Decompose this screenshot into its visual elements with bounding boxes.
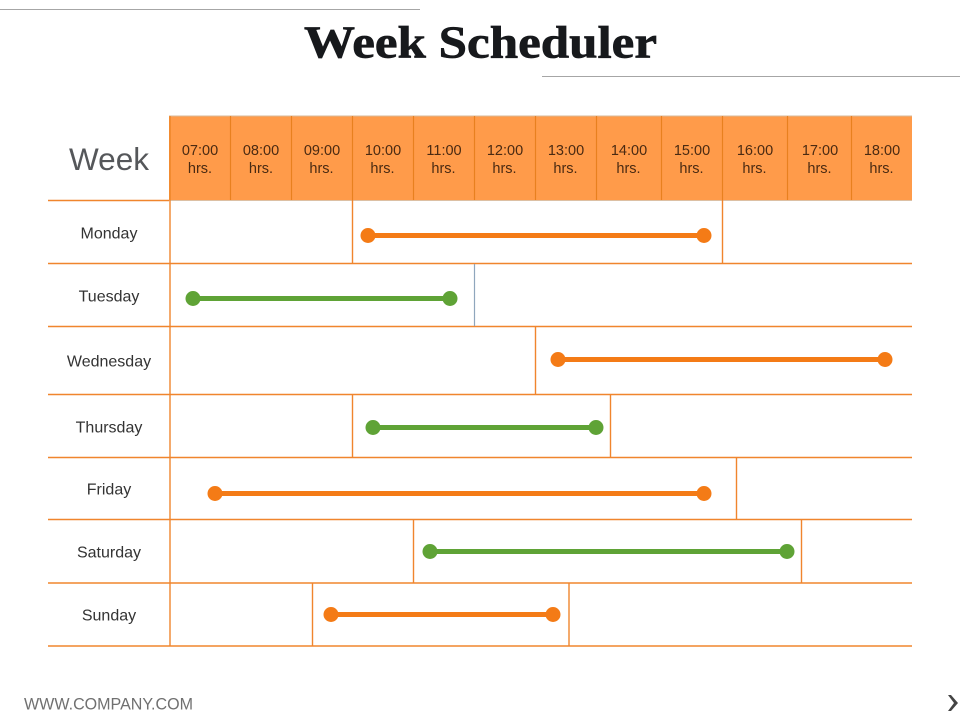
header: hours band: 07:00 bbox=[182, 143, 218, 159]
footer url: WWW.COMPANY.COM bbox=[24, 696, 193, 714]
row label: Sunday: Sunday bbox=[82, 608, 136, 624]
bar: Tuesday 07:00 to 11:00 bbox=[186, 291, 458, 306]
header: hours band: hrs. bbox=[742, 161, 767, 177]
header: hours band: hrs. bbox=[869, 161, 894, 177]
header: hours band bbox=[169, 116, 912, 200]
bar: Friday 07:00 to 15:00 bbox=[208, 486, 712, 501]
header: hours band: 15:00 bbox=[674, 143, 710, 159]
header: hours band: 14:00 bbox=[611, 143, 647, 159]
bar: Thursday 10:00 to 13:00 bbox=[366, 420, 604, 435]
bar: Wednesday 13:00 to 18:00 bbox=[550, 352, 892, 367]
header: hours band: hrs. bbox=[370, 161, 395, 177]
header: hours band: 11:00 bbox=[426, 143, 462, 159]
row label: Tuesday: Tuesday bbox=[79, 288, 139, 306]
header: hours band: 10:00 bbox=[365, 143, 401, 159]
header: hours band: hrs. bbox=[188, 161, 212, 177]
row label: Friday: Friday bbox=[87, 482, 131, 498]
bar: Monday 10:00 to 15:00 bbox=[360, 228, 712, 243]
bar: Saturday 11:00 to 16:00 bbox=[422, 544, 794, 559]
header: hours band: hrs. bbox=[616, 161, 641, 177]
header: hours band: 08:00 bbox=[243, 143, 279, 159]
header: hours band: 13:00 bbox=[548, 143, 584, 159]
header: hours band: hrs. bbox=[309, 161, 334, 177]
header: hours band: hrs. bbox=[807, 161, 832, 177]
title: Week Scheduler bbox=[304, 16, 657, 68]
icon: next arrow bbox=[948, 695, 958, 711]
header: hours band: 16:00 bbox=[737, 143, 773, 159]
header: hours band: 12:00 bbox=[487, 143, 523, 159]
header: hours band: hrs. bbox=[492, 161, 517, 177]
header: hours band: 09:00 bbox=[304, 143, 340, 159]
row label: Wednesday: Wednesday bbox=[67, 354, 151, 370]
header: hours band: hrs. bbox=[249, 161, 273, 177]
row label: Monday: Monday bbox=[81, 226, 137, 242]
header: hours band: hrs. bbox=[431, 161, 456, 177]
header: hours band: hrs. bbox=[679, 161, 704, 177]
header: hours band: 17:00 bbox=[802, 143, 838, 159]
schedule grid bbox=[48, 200, 912, 646]
header: hours band: hrs. bbox=[553, 161, 578, 177]
bar: Sunday 09:00 to 13:00 bbox=[324, 607, 560, 622]
heading: week: Week bbox=[69, 141, 149, 177]
row label: Saturday: Saturday bbox=[77, 544, 141, 562]
header: hours band: 18:00 bbox=[864, 143, 900, 159]
row label: Thursday: Thursday bbox=[76, 420, 142, 436]
